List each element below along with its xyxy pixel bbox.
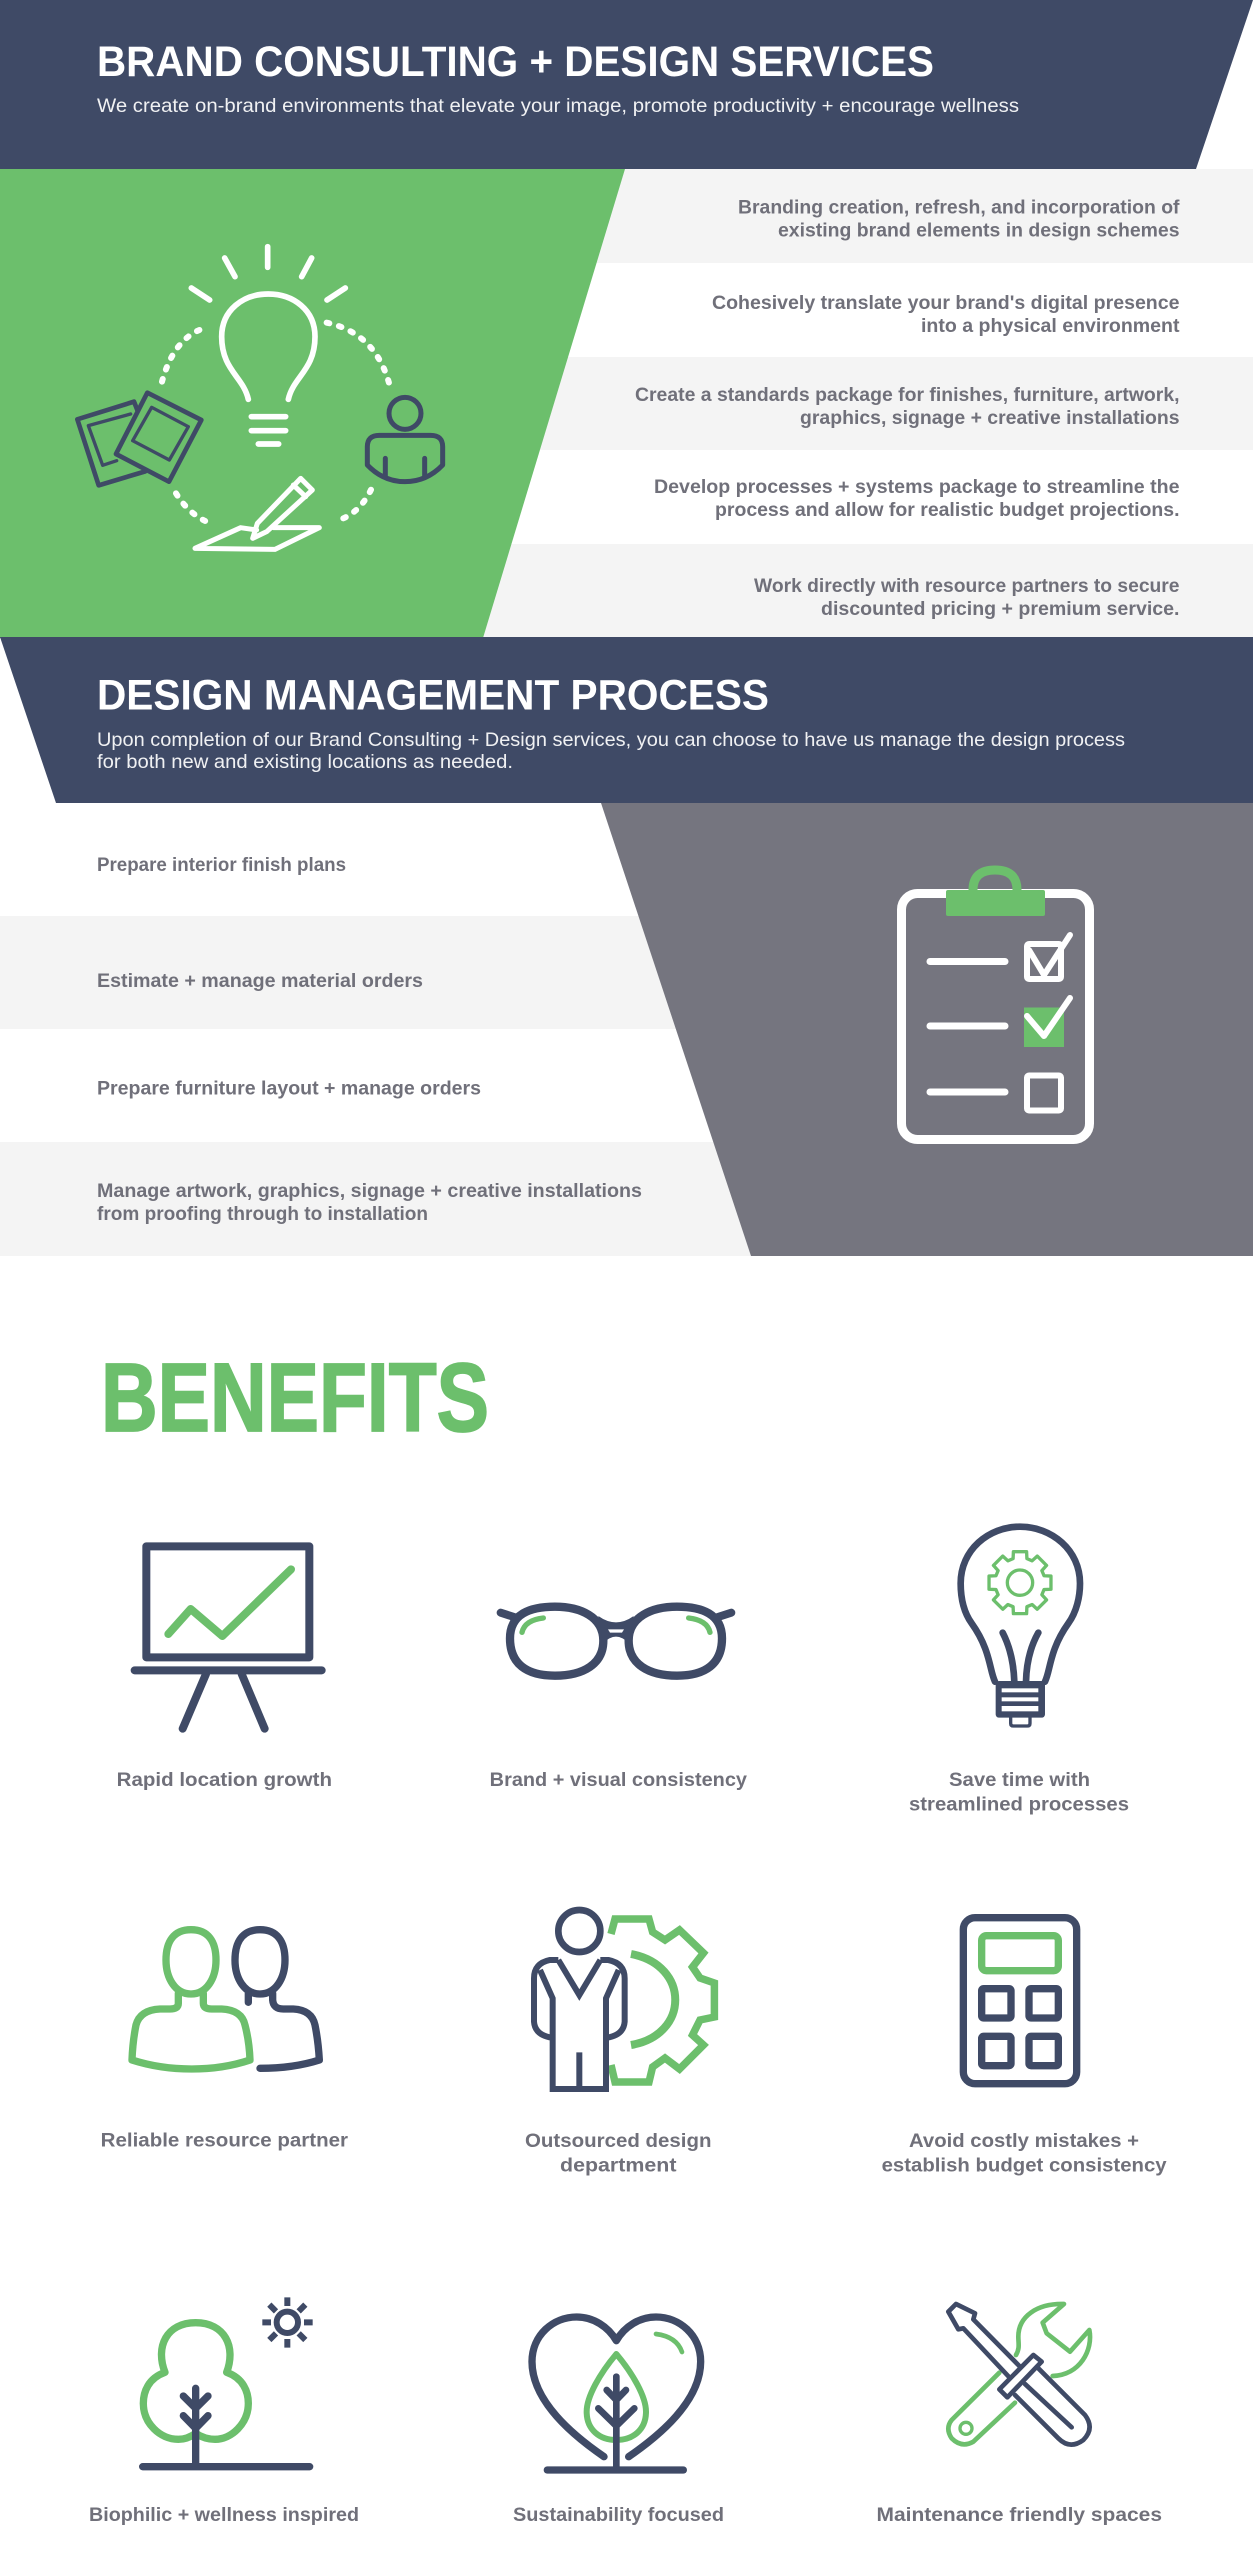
heading: benefits: BENEFITS	[101, 1343, 489, 1452]
icon: idea cycle	[77, 247, 443, 549]
label: Save time with	[949, 1769, 1090, 1791]
text: process 2: Estimate + manage material orders	[97, 970, 423, 992]
label: streamlined processes	[909, 1794, 1129, 1816]
text: process 4: from proofing through to installation	[97, 1203, 428, 1225]
text: service 2	[712, 292, 1180, 337]
text: service 2: Cohesively translate your brand's digital presence	[712, 292, 1180, 314]
label	[882, 2130, 1167, 2177]
label: Reliable resource partner	[101, 2130, 348, 2152]
benefit: save time	[909, 1527, 1129, 1816]
benefit: brand + visual consistency	[490, 1607, 747, 1791]
icon: two people	[132, 1930, 319, 2069]
icon: calculator	[963, 1918, 1077, 2084]
panel: service list rows	[0, 169, 1253, 638]
label: establish budget consistency	[882, 2155, 1167, 2177]
icon: bulb with gear	[961, 1527, 1080, 1726]
icon: person	[367, 397, 443, 482]
text: service 1	[738, 196, 1180, 242]
icon: tree and sun	[143, 2297, 313, 2467]
icon: presentation easel	[135, 1546, 322, 1729]
label: Outsourced design	[525, 2130, 712, 2152]
text: service 4	[654, 476, 1180, 521]
benefit: avoid costly mistakes	[882, 1918, 1167, 2177]
text: service 5	[754, 575, 1180, 620]
benefit: rapid location growth	[117, 1546, 332, 1791]
label	[525, 2130, 712, 2177]
icon: pencil and pad	[195, 478, 319, 549]
label: department	[560, 2155, 677, 2177]
text: process 1: Prepare interior finish plans	[97, 854, 346, 876]
label	[909, 1769, 1129, 1816]
label: Avoid costly mistakes +	[909, 2130, 1139, 2152]
text: service 3: graphics, signage + creative installations	[800, 407, 1180, 429]
panel: process list rows	[0, 854, 800, 1256]
heading: design management: DESIGN MANAGEMENT PROCESS	[97, 672, 769, 720]
text: design management intro: for both new and existing locations as needed.	[97, 751, 513, 773]
benefit: sustainability focused	[513, 2317, 724, 2526]
heading: brand consulting: BRAND CONSULTING + DESIGN SERVICES	[97, 38, 934, 86]
text: service 4: process and allow for realistic budget projections.	[715, 499, 1180, 521]
dotted cycle ring	[162, 323, 390, 522]
label: Rapid location growth	[117, 1769, 332, 1791]
text: service 5: discounted pricing + premium service.	[821, 598, 1180, 620]
icon: heart and leaf	[532, 2317, 701, 2470]
text: process 3: Prepare furniture layout + manage orders	[97, 1078, 481, 1100]
icon: screwdriver and wrench	[948, 2304, 1090, 2445]
text: service 1: Branding creation, refresh, and incorporation of	[738, 196, 1180, 218]
text: brand consulting subtitle: We create on-brand environments that elevate your image, promote productivity + encourage wellness	[97, 95, 1019, 117]
text: service 4: Develop processes + systems package to streamline the	[654, 476, 1180, 498]
text: process 4	[97, 1180, 642, 1225]
icon: glasses	[501, 1607, 731, 1676]
text: design management intro: Upon completion of our Brand Consulting + Design services, you can choose to have us manage the design process	[97, 729, 1125, 751]
panel: green icon panel	[0, 169, 625, 638]
icon: person with gear	[534, 1910, 714, 2089]
benefit: biophilic + wellness	[89, 2297, 359, 2526]
icon: photos	[77, 393, 201, 485]
text: process 4: Manage artwork, graphics, signage + creative installations	[97, 1180, 642, 1202]
text: service 3	[635, 384, 1180, 429]
text: service 5: Work directly with resource partners to secure	[754, 575, 1180, 597]
text: service 1: existing brand elements in design schemes	[778, 220, 1180, 242]
text: service 3: Create a standards package for finishes, furniture, artwork,	[635, 384, 1180, 406]
icon: light bulb	[191, 247, 345, 444]
panel: gray clipboard panel	[601, 803, 1253, 1256]
label: Sustainability focused	[513, 2504, 724, 2526]
panel: design management header	[0, 637, 1253, 803]
benefit: outsourced design department	[525, 1910, 714, 2177]
label: Maintenance friendly spaces	[876, 2504, 1162, 2526]
icon: clipboard checklist	[902, 870, 1090, 1140]
benefit: reliable resource partner	[101, 1930, 348, 2152]
text: service 2: into a physical environment	[921, 315, 1180, 337]
label: Brand + visual consistency	[490, 1769, 747, 1791]
text: design management intro	[97, 729, 1125, 773]
panel: brand consulting header	[0, 0, 1253, 169]
benefit: maintenance friendly spaces	[876, 2304, 1162, 2526]
label: Biophilic + wellness inspired	[89, 2504, 359, 2526]
